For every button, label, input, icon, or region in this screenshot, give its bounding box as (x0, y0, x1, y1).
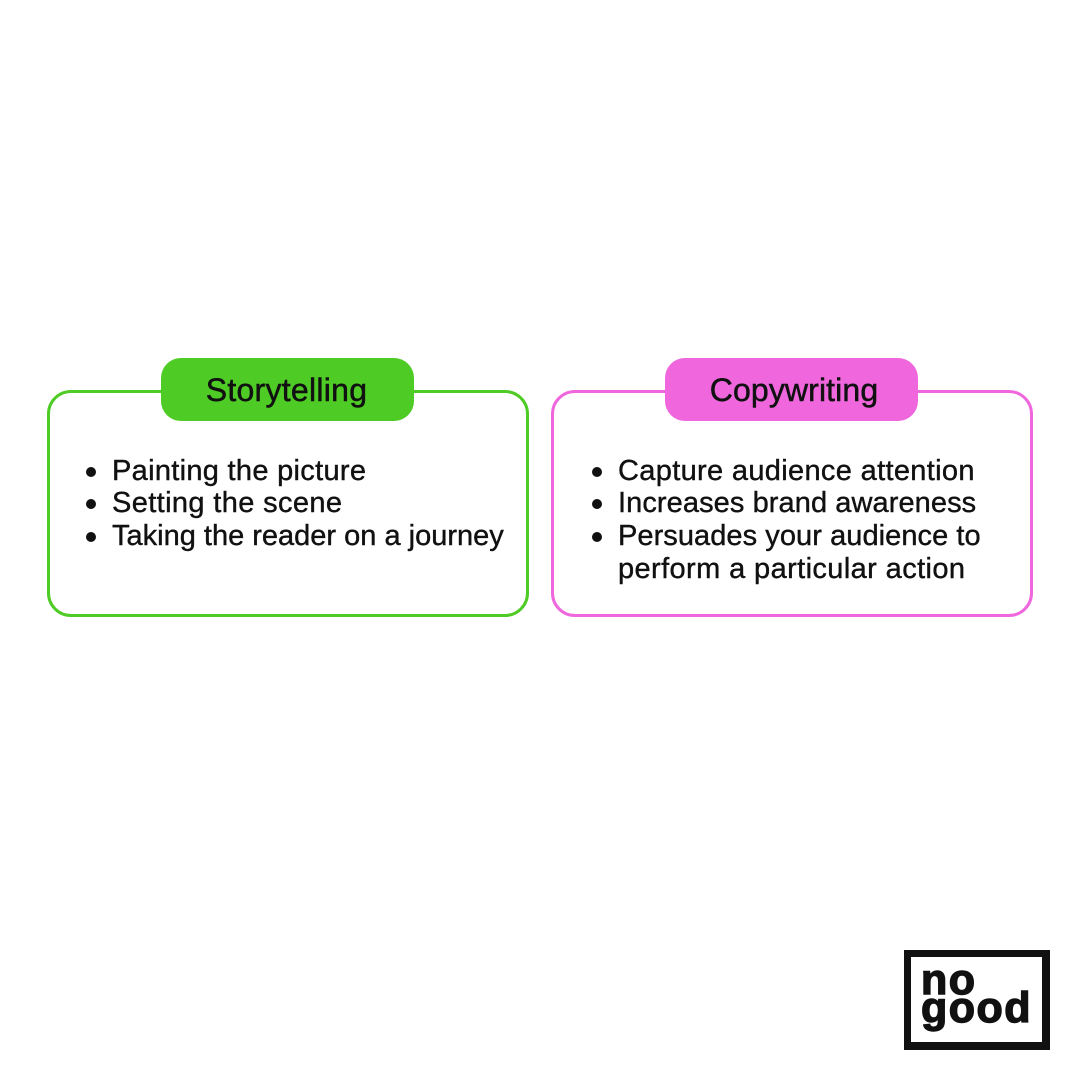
bullet: increases brand awareness: Increases brand awareness (618, 487, 976, 519)
bullet list: copywriting (592, 455, 981, 585)
panel outline: copywriting (551, 390, 1033, 617)
bullet: persuades your audience: Persuades your audience to (618, 520, 981, 552)
heading: copywriting (665, 358, 918, 421)
bullet: capture audience attention: Capture audience attention (618, 455, 975, 487)
logo word: no: no (921, 956, 977, 1004)
heading: copywriting: Copywriting (710, 372, 878, 408)
heading: storytelling (161, 358, 414, 421)
bullet: taking the reader: Taking the reader on a journey (112, 520, 504, 552)
heading: storytelling: Storytelling (206, 372, 367, 408)
panel outline: storytelling (47, 390, 529, 617)
logo: no good (904, 950, 1050, 1050)
bullet list: storytelling (86, 455, 504, 552)
bullet: persuades your audience: perform a particular action (618, 553, 965, 585)
panel: copywriting (551, 358, 1033, 617)
logo word: good: good (921, 984, 1032, 1032)
bullet: setting the scene: Setting the scene (112, 487, 342, 519)
bullet: painting the picture: Painting the picture (112, 455, 366, 487)
bullet: persuades your audience (592, 520, 981, 585)
panel: storytelling (47, 358, 529, 617)
